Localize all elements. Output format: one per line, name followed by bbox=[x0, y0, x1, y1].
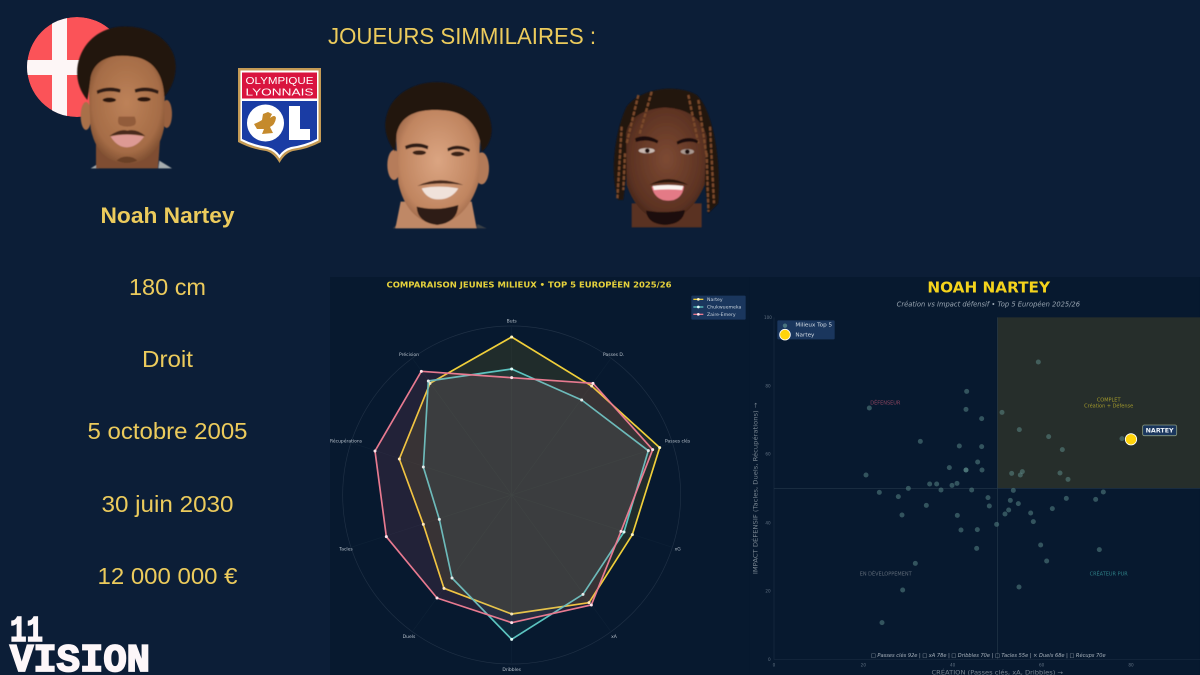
logo: 11 Vision: 11 bbox=[10, 611, 43, 652]
radar legend bbox=[691, 296, 746, 320]
radar legend: Zaire-Emery bbox=[707, 312, 736, 318]
quadrant label: pure creator: CRÉATEUR PUR bbox=[1090, 569, 1128, 577]
scatter points: midfielders bbox=[863, 359, 1124, 625]
contract end: 30 juin 2030 bbox=[102, 491, 234, 517]
radar axis labels: Passes clés bbox=[665, 438, 691, 445]
logo text: OLYMPIQUE bbox=[246, 75, 314, 87]
scatter legend: Milieux Top 5 bbox=[795, 323, 832, 329]
quadrant label: complete: Création + Défense bbox=[1084, 402, 1133, 409]
panel: scatter plot bbox=[750, 277, 1200, 675]
panel: radar chart bbox=[330, 277, 750, 675]
highlighted quadrant bbox=[997, 317, 1200, 488]
player height: 180 cm bbox=[129, 274, 206, 300]
heading: similar players: JOUEURS SIMMILAIRES : bbox=[328, 23, 596, 49]
radar axis labels: xA bbox=[611, 634, 618, 640]
logo: 11 Vision bbox=[10, 611, 150, 675]
radar title: COMPARAISON JEUNES MILIEUX • TOP 5 EUROPÉEN 2025/26 bbox=[386, 279, 672, 290]
axis tick labels bbox=[764, 315, 1134, 668]
radar axis labels: Dribbles bbox=[502, 667, 522, 673]
y axis title: IMPACT DÉFENSIF (Tacles, Duels, Récupérations) → bbox=[752, 402, 760, 574]
quadrant label: developing: EN DÉVELOPPEMENT bbox=[860, 569, 913, 577]
callout: Nartey label bbox=[1143, 425, 1177, 436]
axis tick labels: 0 bbox=[768, 657, 771, 662]
radar axis labels: Duels bbox=[403, 634, 416, 640]
radar axis labels: Passes D. bbox=[603, 352, 624, 358]
axis tick labels: 20 bbox=[861, 663, 866, 668]
crest circle with lion bbox=[247, 104, 284, 142]
radar axis labels: Buts bbox=[507, 319, 517, 325]
quadrant label: complete bbox=[1084, 397, 1133, 409]
radar axis labels bbox=[330, 319, 691, 673]
scatter subtitle: Création vs Impact défensif • Top 5 Européen 2025/26 bbox=[897, 301, 1080, 309]
quadrant label: defender: DÉFENSEUR bbox=[870, 398, 901, 406]
radar series: Nartey bbox=[398, 335, 661, 615]
preferred foot: Droit bbox=[142, 346, 194, 372]
quadrant label: complete: COMPLET bbox=[1097, 397, 1121, 403]
stats footnote: □ Passes clés 92e | □ xA 78e | □ Dribbles 70e | □ Tacles 55e | × Duels 68e | □ Récups 70e bbox=[871, 652, 1106, 659]
callout: Nartey label: NARTEY bbox=[1146, 427, 1174, 434]
crest letter L bbox=[289, 106, 310, 140]
radar grid bbox=[343, 326, 681, 664]
scatter legend bbox=[777, 320, 835, 340]
highlighted point: Nartey bbox=[1125, 434, 1137, 445]
radar axis labels: xG bbox=[675, 547, 681, 553]
birth date: 5 octobre 2005 bbox=[88, 418, 248, 444]
radar axis labels: Récupérations bbox=[330, 438, 363, 445]
scatter legend: Nartey bbox=[795, 332, 815, 338]
scatter title: NOAH NARTEY bbox=[927, 279, 1050, 296]
radar legend: Nartey bbox=[707, 297, 723, 303]
logo text: Lyonnais: LYONNAIS bbox=[246, 86, 314, 98]
player name: Noah Nartey bbox=[100, 203, 235, 228]
photo: Noah Nartey portrait bbox=[77, 27, 176, 168]
axes and quadrant lines bbox=[774, 317, 1200, 659]
axis tick labels: 60 bbox=[1039, 663, 1045, 668]
radar series: Chukwuemeka bbox=[422, 367, 650, 641]
radar axis labels: Précision bbox=[399, 351, 419, 358]
radar series: Zaire-Emery bbox=[373, 370, 654, 624]
axis tick labels: 40 bbox=[950, 663, 956, 668]
market value: 12 000 000 € bbox=[98, 563, 238, 589]
axis tick labels: 80 bbox=[1128, 663, 1134, 668]
axis tick labels: 20 bbox=[765, 589, 771, 594]
axis tick labels: 100 bbox=[764, 315, 772, 320]
radar legend: Chukwuemeka bbox=[707, 305, 741, 311]
photo: similar player 2 bbox=[614, 89, 719, 227]
axis tick labels: 80 bbox=[765, 383, 771, 388]
axis tick labels: 40 bbox=[765, 520, 771, 525]
radar axis labels: Tacles bbox=[338, 547, 353, 553]
logo: Olympique Lyonnais crest bbox=[238, 68, 321, 163]
icon: Denmark flag circle bbox=[27, 17, 110, 117]
axis tick labels: 60 bbox=[765, 452, 771, 457]
axis tick labels: 0 bbox=[773, 663, 776, 668]
photo: similar player 1 bbox=[385, 82, 492, 228]
